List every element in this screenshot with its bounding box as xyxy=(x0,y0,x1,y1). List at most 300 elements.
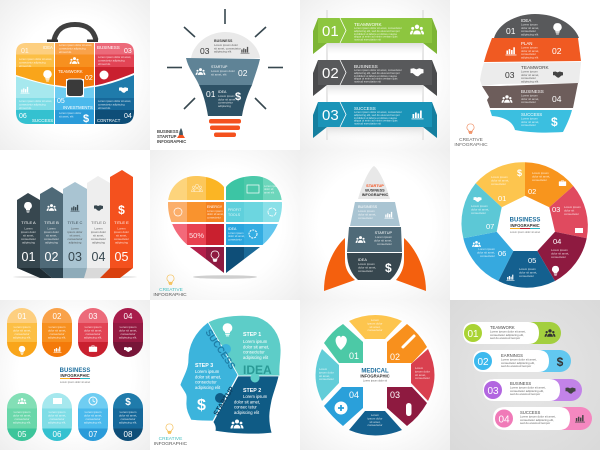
banner 3: adipiscing elit, sed do eiusmod tempor xyxy=(354,113,400,117)
wheel segment 2 xyxy=(525,162,573,207)
wheel labels: dolor sit amet, xyxy=(471,207,489,211)
rocket section idea: $ xyxy=(385,261,392,275)
bulb text xyxy=(196,39,250,108)
column C: ipsum dolor xyxy=(68,230,83,234)
head band 1 xyxy=(494,14,579,38)
briefcase labels: elit sed do xyxy=(59,50,72,54)
step pill 03: 03 xyxy=(487,386,499,397)
briefcase bottom-middle segment xyxy=(55,86,94,124)
pill 03 xyxy=(78,308,108,357)
rocket right fin xyxy=(396,238,426,291)
briefcase labels: elit sed do xyxy=(19,106,32,110)
banner 1: incididunt ut labore et dolore magna xyxy=(354,32,397,36)
column A: sit amet, xyxy=(23,234,34,238)
rocket section startup: dolor sit amet, xyxy=(374,238,392,242)
pill 01: 01 xyxy=(18,312,27,321)
column D: ipsum dolor xyxy=(91,230,106,234)
wheel labels: 07 xyxy=(486,222,494,231)
puzzle head text: dolor sit amet, xyxy=(243,344,269,349)
head text: consectetur xyxy=(521,76,536,80)
logo: business startup infographic: BUSINESS xyxy=(157,129,179,134)
column C: TITLE C xyxy=(68,220,83,225)
column A xyxy=(17,193,40,268)
head text: PLAN xyxy=(521,41,532,46)
step pill 01 xyxy=(463,322,561,344)
pill 06: consectetur xyxy=(50,417,65,421)
background stripes and shadows xyxy=(326,10,424,140)
step pill 02: $ xyxy=(557,355,564,369)
column D: TITLE D xyxy=(91,220,106,225)
bulb base bars xyxy=(209,119,241,137)
heart text and icons: consectetur xyxy=(207,215,221,219)
heart text and icons: TOOLS xyxy=(228,213,241,217)
icon: briefcase handle xyxy=(47,24,98,42)
panel: layered head xyxy=(454,14,581,148)
pill 05: consectetur xyxy=(15,417,30,421)
step pill 03: sed do eiusmod tempor xyxy=(510,392,540,396)
logo: creative infographic: CREATIVE xyxy=(159,436,182,442)
medical segment bottom xyxy=(349,411,402,436)
puzzle head text: IDEA xyxy=(243,363,272,377)
panel: puzzle head xyxy=(154,315,281,447)
briefcase top-left segment xyxy=(16,43,54,85)
medical segment right: sit amet, xyxy=(415,373,426,377)
wheel labels: dolor sit amet, xyxy=(551,251,569,255)
wheel labels: 04 xyxy=(553,237,561,246)
medical segment 03: 03 xyxy=(390,390,400,400)
step pill 04: 04 xyxy=(498,414,510,426)
banner 3: 03 xyxy=(322,107,339,124)
pill 08: 08 xyxy=(124,430,133,439)
head segment step 1 xyxy=(208,315,281,376)
puzzle head text: SUCCESS xyxy=(203,328,237,372)
banner 3: aliqua ut enim ad minim veniam quis xyxy=(354,119,398,123)
medical segment bottom: consectetur xyxy=(368,423,383,427)
step pill 02 xyxy=(473,350,571,372)
rocket section idea: dolor sit amet, xyxy=(358,265,376,269)
pill 04 xyxy=(113,308,143,357)
step pill 02: Lorem ipsum dolor sit amet, xyxy=(501,358,537,362)
bulb text: 03 xyxy=(200,46,210,56)
heart text and icons: dolor sit xyxy=(264,187,274,191)
logo: business startup infographic: STARTUP xyxy=(157,134,177,139)
rocket section startup: consectetur xyxy=(377,242,392,246)
step pill 02: sed do eiusmod tempor xyxy=(501,364,531,368)
bulb text: dolor sit amet xyxy=(218,97,236,101)
medical wheel title: MEDICAL xyxy=(361,368,389,374)
banner 2 xyxy=(313,60,437,96)
banner 1: aliqua ut enim ad minim veniam quis xyxy=(354,35,398,39)
pill 07: adipiscing elit. xyxy=(84,420,102,424)
medical segment top: sit amet, xyxy=(370,325,381,329)
head text: 02 xyxy=(552,46,562,56)
briefcase top-middle segment xyxy=(55,43,94,87)
pill 08: $ xyxy=(125,397,131,408)
pill 08: dolor sit amet, xyxy=(119,414,137,418)
briefcase labels: 05 xyxy=(57,98,65,105)
wheel labels: dolor sit xyxy=(564,208,574,212)
pill 04: consectetur xyxy=(121,332,136,336)
wheel segment 5 xyxy=(498,251,555,288)
briefcase labels: Lorem ipsum dolor sit amet, xyxy=(98,55,131,59)
ground shadow xyxy=(13,276,137,278)
wheel labels: Lorem ipsum xyxy=(491,175,508,179)
centre title xyxy=(60,368,90,384)
column A: consectetur xyxy=(21,237,36,241)
step pill 02: consectetur adipiscing elit, xyxy=(501,361,535,365)
column D: sit amet, xyxy=(93,234,104,238)
medical wheel title: INFOGRAPHIC xyxy=(360,374,390,378)
banner 1: adipiscing elit, sed do eiusmod tempor xyxy=(354,29,400,33)
pill 03: adipiscing elit. xyxy=(84,336,102,340)
step pill 02: 02 xyxy=(477,357,489,368)
rocket nose xyxy=(358,166,390,199)
wheel labels: dolor sit amet, xyxy=(519,270,537,274)
column D: consectetur xyxy=(91,237,106,241)
banner 1: nostrud exercitation sit xyxy=(354,38,381,42)
pill 06: Lorem ipsum xyxy=(49,410,66,414)
wheel segment 6 xyxy=(463,232,513,281)
wheel labels: consectetur xyxy=(491,182,506,186)
rocket section business: dolor sit amet, xyxy=(358,212,376,216)
pill 08: Lorem ipsum xyxy=(120,410,137,414)
pill 06 xyxy=(42,393,72,441)
briefcase labels: TEAMWORK xyxy=(58,69,83,74)
column C: Lorem xyxy=(71,226,80,230)
panel: step pills xyxy=(463,322,592,430)
bulb text: Lorem ipsum xyxy=(218,94,235,98)
medical wheel title xyxy=(360,368,390,382)
medical segment left: ipsum dolor xyxy=(319,370,334,374)
rocket title: BUSINESS xyxy=(365,188,385,192)
wheel segment 4 xyxy=(537,232,587,281)
heart text and icons: ENERGY xyxy=(207,205,223,209)
medical segment top: consectetur xyxy=(368,328,383,332)
banner 2: nostrud exercitation sit xyxy=(354,80,381,84)
head text: adipiscing elit xyxy=(521,79,539,83)
panel: ribbon banners xyxy=(313,10,437,140)
wheel centre title: BUSINESS xyxy=(510,218,540,224)
puzzle head text: Lorem ipsum xyxy=(195,369,220,374)
step pill 04 xyxy=(493,407,592,430)
briefcase labels: elit sed do xyxy=(98,62,111,66)
column B: TITLE B xyxy=(44,220,59,225)
column folds xyxy=(17,268,133,278)
step pill 01: consectetur adipiscing elit, xyxy=(490,333,524,337)
step pill 02: EARNINGS xyxy=(501,353,523,358)
column B: adipiscing xyxy=(45,240,58,244)
step pill 04: Lorem ipsum dolor sit amet, xyxy=(520,414,556,418)
puzzle head text: $ xyxy=(197,397,206,414)
wheel labels: 01 xyxy=(498,194,506,203)
bulb text: adipiscing elit xyxy=(214,50,232,54)
banner 2: 02 xyxy=(322,65,339,82)
pill 07: 07 xyxy=(89,430,98,439)
briefcase labels: BUSINESS xyxy=(97,45,120,50)
heart text and icons: IDEA xyxy=(228,227,237,231)
wheel labels: 06 xyxy=(498,249,506,258)
pill 04: dolor sit amet, xyxy=(119,328,137,332)
head text: IDEA xyxy=(521,18,531,23)
ground shadow xyxy=(193,275,257,279)
banner 3: Lorem ipsum dolor sit amet, consectetur xyxy=(354,110,402,114)
wheel centre title: Lorem ipsum dolor sit amet xyxy=(510,231,540,234)
bulb text: sit amet, consectetur xyxy=(214,46,241,50)
wheel labels: Lorem ipsum xyxy=(471,204,488,208)
column C: sit amet, xyxy=(70,234,81,238)
pill 02 xyxy=(42,308,72,357)
head text: $ xyxy=(551,115,558,129)
column B: Lorem xyxy=(47,226,56,230)
rocket section business: Lorem ipsum xyxy=(358,209,375,213)
column A: ipsum dolor xyxy=(21,230,36,234)
briefcase icons xyxy=(20,57,128,93)
briefcase labels: elit sed do xyxy=(98,106,111,110)
pill 08 xyxy=(113,393,143,441)
medical segment bottom: ipsum dolor xyxy=(368,416,383,420)
panel: rocket infographic xyxy=(324,166,426,291)
pill 02: Lorem ipsum xyxy=(49,325,66,329)
medical segment left: sit amet, xyxy=(319,374,330,378)
briefcase labels: consectetur adipiscing xyxy=(98,58,125,62)
head segment step 2 xyxy=(213,376,279,434)
bulb text: $ xyxy=(235,91,241,103)
medical segment left: Lorem xyxy=(319,367,328,371)
column A: adipiscing xyxy=(22,240,35,244)
rocket section idea: IDEA xyxy=(358,258,367,262)
pill 04: 04 xyxy=(124,312,133,321)
step pill 03 xyxy=(483,379,582,401)
briefcase labels: consectetur adipiscing xyxy=(98,102,125,106)
rocket title: STARTUP xyxy=(366,184,384,188)
medical segment 04: 04 xyxy=(349,390,359,400)
head text: BUSINESS xyxy=(521,89,544,94)
banner 1: Lorem ipsum dolor sit amet, consectetur xyxy=(354,26,402,30)
heart text and icons: Lorem ipsum xyxy=(264,184,280,188)
briefcase labels: 02 xyxy=(85,75,93,82)
medical segment right: ipsum dolor xyxy=(415,369,430,373)
banner 2: adipiscing elit, sed do eiusmod tempor xyxy=(354,71,400,75)
column E: consectetur xyxy=(114,237,129,241)
banner 2: incididunt ut labore et dolore magna xyxy=(354,74,397,78)
pill 08: adipiscing elit. xyxy=(119,420,137,424)
centre title: BUSINESS xyxy=(60,368,90,374)
head text: SUCCESS xyxy=(521,112,542,117)
puzzle head text: STEP 2 xyxy=(243,388,261,394)
bulb text: 02 xyxy=(238,68,248,78)
head text: consectetur xyxy=(521,29,536,33)
rocket section business xyxy=(350,202,400,226)
head text: Lorem ipsum xyxy=(521,94,538,98)
wheel labels: Lorem ipsum xyxy=(551,248,568,252)
step pill 03: consectetur adipiscing elit, xyxy=(510,389,544,393)
step pill 03: Lorem ipsum dolor sit amet, xyxy=(510,386,546,390)
pill 05: 05 xyxy=(18,430,27,439)
column A: 01 xyxy=(22,250,35,264)
heart text and icons: Lorem ipsum xyxy=(228,231,244,235)
column B: 02 xyxy=(45,250,58,264)
pill 01: Lorem ipsum xyxy=(14,325,31,329)
wheel labels: consectetur xyxy=(519,274,534,278)
pill 01: dolor sit amet, xyxy=(13,328,31,332)
column C: 03 xyxy=(68,250,82,264)
head text: consectetur xyxy=(521,52,536,56)
column B: ipsum dolor xyxy=(44,230,59,234)
wheel labels: 05 xyxy=(528,256,536,265)
column B xyxy=(40,187,63,268)
head text: adipiscing elit xyxy=(521,32,539,36)
briefcase labels: Lorem ipsum dolor sit amet, xyxy=(19,57,52,61)
rocket section business: consectetur xyxy=(358,216,373,220)
pill 03: 03 xyxy=(89,312,98,321)
puzzle head text: Lorem ipsum xyxy=(243,394,268,399)
pill 01 xyxy=(7,308,37,357)
panel: seven-segment wheel xyxy=(461,162,588,288)
column E: adipiscing xyxy=(115,240,128,244)
banner 1: 01 xyxy=(322,23,339,40)
step pill 03: BUSINESS xyxy=(510,381,531,386)
puzzle knobs xyxy=(215,344,260,403)
rocket section startup xyxy=(347,227,402,252)
banner 3: incididunt ut labore et dolore magna xyxy=(354,116,397,120)
briefcase labels: $ xyxy=(83,113,89,125)
banner 2: aliqua ut enim ad minim veniam quis xyxy=(354,77,398,81)
medical segment top xyxy=(349,315,402,339)
head text: dolor sit amet, xyxy=(521,120,539,124)
bulb rays xyxy=(167,9,283,109)
medical segment left xyxy=(316,349,339,401)
column B: sit amet, xyxy=(46,234,57,238)
pill 07: consectetur xyxy=(86,417,101,421)
wheel labels: consectetur xyxy=(551,255,566,259)
briefcase labels: Lorem ipsum dolor xyxy=(59,111,81,115)
briefcase labels: 06 xyxy=(19,113,27,120)
column E: TITLE E xyxy=(114,220,129,225)
medical segment bottom: Lorem xyxy=(371,413,380,417)
pill 05: dolor sit amet, xyxy=(13,414,31,418)
panel: arrow columns xyxy=(13,170,137,278)
wheel labels: consectetur xyxy=(480,254,495,258)
pill 04: adipiscing elit. xyxy=(119,336,137,340)
wheel labels: Lorem ipsum xyxy=(519,267,536,271)
centre title: Lorem ipsum dolor sit amet xyxy=(60,381,90,384)
bulb top section xyxy=(191,32,260,58)
heart text and icons: amet elit xyxy=(264,190,274,194)
pill 04: Lorem ipsum xyxy=(120,325,137,329)
medical segment right: Lorem xyxy=(415,366,424,370)
briefcase labels: elit sed do xyxy=(19,64,32,68)
step pill 04: consectetur adipiscing elit, xyxy=(520,418,554,422)
column B: consectetur xyxy=(44,237,59,241)
column E: sit amet, xyxy=(116,234,127,238)
bulb text: 01 xyxy=(206,89,216,99)
wheel centre title xyxy=(510,218,540,234)
column E: ipsum dolor xyxy=(114,230,129,234)
pill 05 xyxy=(7,393,37,441)
wheel segment 1 xyxy=(476,162,525,207)
bulb text: BUSINESS xyxy=(214,39,233,43)
step pill 01: 01 xyxy=(467,329,479,340)
briefcase labels: Lorem ipsum dolor sit amet, xyxy=(19,99,52,103)
wheel labels: 02 xyxy=(528,187,536,196)
puzzle head text: Lorem ipsum xyxy=(243,339,268,344)
head text: 04 xyxy=(552,94,562,104)
step pill 01: TEAMWORK xyxy=(490,325,515,330)
heart segments xyxy=(168,176,282,273)
puzzle head text: consec tetur xyxy=(234,405,257,410)
wheel labels: consectetur xyxy=(532,178,547,182)
puzzle head text: adipiscing elit xyxy=(195,385,221,390)
rocket section idea: Lorem ipsum xyxy=(358,262,375,266)
step pill 01: sed do eiusmod tempor xyxy=(490,336,520,340)
pill 06: dolor sit amet, xyxy=(48,414,66,418)
briefcase labels: sit amet, elit xyxy=(59,114,74,118)
briefcase labels: consectetur adipiscing xyxy=(19,102,46,106)
banner 1: TEAMWORK xyxy=(354,22,382,27)
wheel labels: dolor sit amet, xyxy=(532,174,550,178)
column D: adipiscing xyxy=(92,240,105,244)
briefcase labels: CONTRACT xyxy=(97,118,121,123)
panel: medical wheel xyxy=(316,315,434,436)
head text: 01 xyxy=(506,26,516,36)
pill 01: consectetur xyxy=(15,332,30,336)
rocket section startup: Lorem ipsum xyxy=(375,235,393,239)
medical segment right xyxy=(411,349,434,401)
logo: creative infographic xyxy=(153,275,187,298)
rocket left fin xyxy=(324,238,355,291)
banner 1 xyxy=(313,18,437,54)
wheel centre title: INFOGRAPHIC xyxy=(510,223,540,228)
logo: creative infographic: CREATIVE xyxy=(159,287,183,293)
heart text and icons xyxy=(174,184,280,262)
step pill 01: Lorem ipsum dolor sit amet, xyxy=(490,330,526,334)
medical segment right: consectetur xyxy=(415,376,430,380)
briefcase labels: 04 xyxy=(124,113,132,120)
logo: creative infographic: INFOGRAPHIC xyxy=(153,292,187,298)
wheel labels: $ xyxy=(517,168,522,178)
briefcase labels: consectetur adipiscing xyxy=(19,60,46,64)
wheel labels: dolor sit amet, xyxy=(477,250,495,254)
rocket section idea xyxy=(347,253,402,280)
medical wheel title: Lorem ipsum dolor sit xyxy=(363,380,387,382)
wheel labels: dolor sit amet, xyxy=(491,178,509,182)
medical segment 02: 02 xyxy=(390,352,400,362)
pill 02: dolor sit amet, xyxy=(48,328,66,332)
wheel segment 3 xyxy=(549,186,588,238)
briefcase bottom-left segment xyxy=(16,76,54,124)
bulb middle section xyxy=(186,58,260,85)
head text: Lorem ipsum xyxy=(521,22,538,26)
panel: briefcase infographic xyxy=(16,24,134,125)
head text: Lorem ipsum xyxy=(521,70,538,74)
briefcase labels: INVESTMENTS xyxy=(63,105,93,110)
head text: consectetur xyxy=(521,100,536,104)
column A: TITLE A xyxy=(21,220,36,225)
puzzle head text: adipiscing elit xyxy=(243,355,269,360)
banner 3 xyxy=(313,102,437,138)
bulb text: sit amet, elit xyxy=(211,72,227,76)
head text: TEAMWORK xyxy=(521,65,549,70)
step pill 04: sed do eiusmod tempor xyxy=(520,421,550,425)
briefcase labels: Lorem ipsum dolor sit amet, xyxy=(98,99,131,103)
briefcase labels xyxy=(19,43,132,125)
pill 06: adipiscing elit. xyxy=(48,420,66,424)
puzzle head text: STEP 3 xyxy=(195,363,213,369)
bulb text: STARTUP xyxy=(211,65,228,69)
pill 03: Lorem ipsum xyxy=(85,325,102,329)
centre title: INFOGRAPHIC xyxy=(60,373,90,378)
banner 3: nostrud exercitation sit xyxy=(354,122,381,126)
